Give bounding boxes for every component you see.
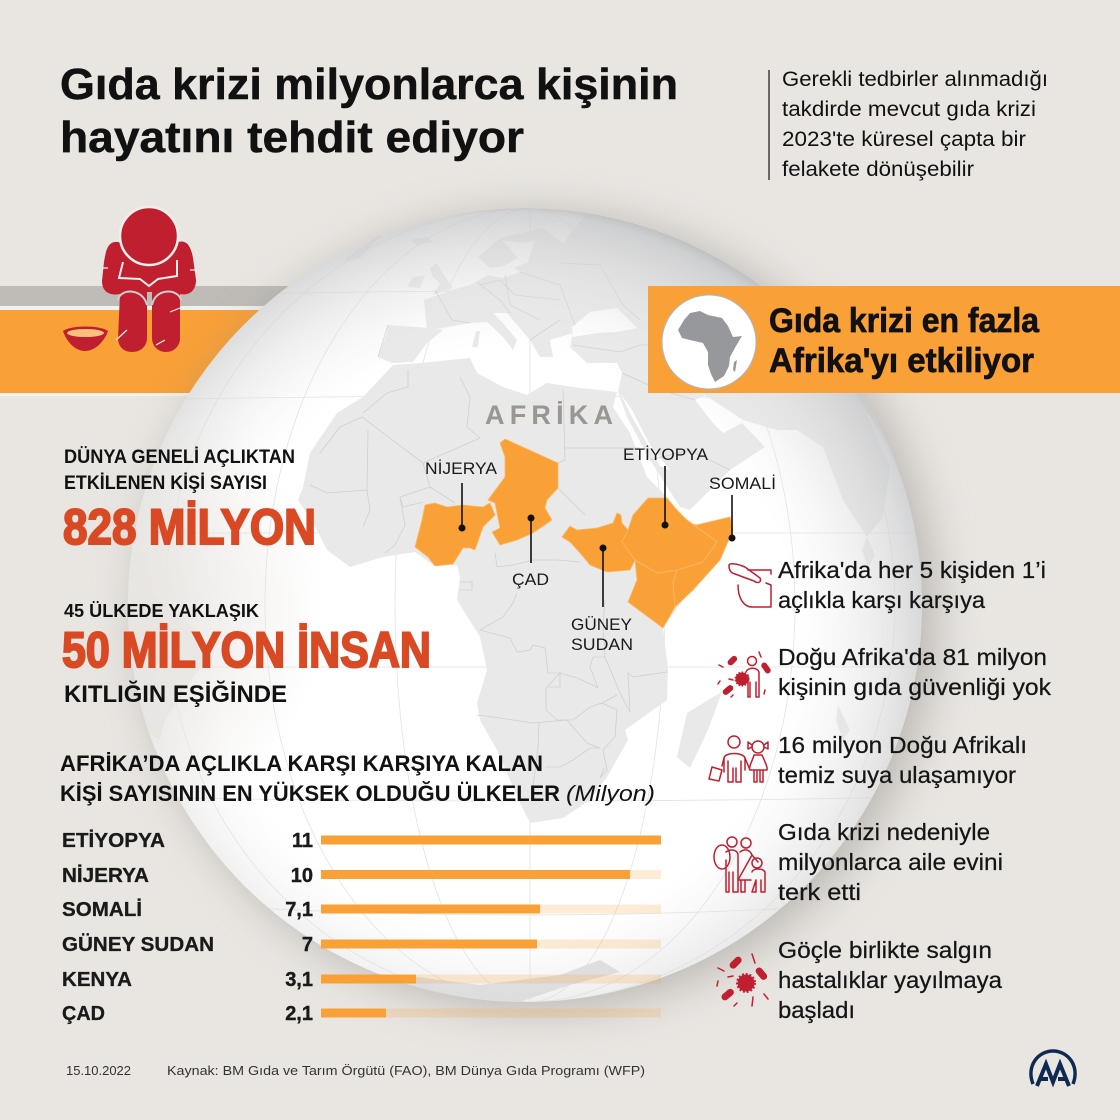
text: families left homes: Gıda krizi nedeniyle bbox=[778, 819, 990, 845]
stat: 828 million: DÜNYA GENELİ AÇLIKTAN bbox=[64, 447, 295, 468]
bar chart bbox=[62, 829, 661, 1025]
icon: virus and capsules bbox=[717, 954, 769, 1006]
stat: 828 million: 828 MİLYON bbox=[63, 499, 316, 555]
map label: Güney Sudan with leader: GÜNEY bbox=[571, 615, 632, 634]
country: Somalia bbox=[673, 517, 733, 607]
country: Ethiopia bbox=[622, 498, 717, 573]
country: Kenya bbox=[628, 560, 677, 628]
map label: Nijerya with leader: NİJERYA bbox=[425, 459, 498, 478]
title: Gıda krizi milyonlarca kişinin bbox=[60, 60, 678, 109]
map label: AFRİKA: AFRİKA bbox=[485, 400, 613, 430]
icon: hungry sitting person with bowl bbox=[63, 207, 197, 352]
text: clean water: temiz suya ulaşamıyor bbox=[778, 762, 1016, 788]
stat: 50 million: 50 MİLYON İNSAN bbox=[62, 622, 431, 678]
country borders bbox=[310, 263, 730, 787]
intro note: takdirde mevcut gıda krizi bbox=[782, 98, 1036, 121]
text: epidemics: başladı bbox=[778, 997, 855, 1023]
bar: Çad 2,1: 2,1 bbox=[285, 1003, 313, 1025]
bar: Etiyopya 11: 11 bbox=[292, 830, 313, 852]
bar: Somali 7,1: 7,1 bbox=[285, 899, 313, 921]
stat: 50 million: 45 ÜLKEDE YAKLAŞIK bbox=[64, 601, 259, 621]
icon: adult, child and bucket bbox=[709, 736, 768, 782]
bar: Etiyopya 11 bbox=[62, 829, 661, 852]
country: South Sudan bbox=[562, 513, 635, 572]
bar: Çad 2,1: ÇAD bbox=[62, 1003, 105, 1025]
afflicted countries on map bbox=[415, 439, 733, 628]
map label: Etiyopya with leader bbox=[623, 445, 709, 528]
inland seas bbox=[472, 240, 670, 470]
icon: Africa silhouette in circle bbox=[662, 295, 756, 389]
country: Nigeria bbox=[415, 503, 495, 566]
bar: Nijerya 10: 10 bbox=[291, 865, 313, 887]
callout heading bbox=[769, 302, 1040, 380]
bar: Güney Sudan 7 bbox=[62, 933, 661, 956]
map label: Çad with leader bbox=[512, 514, 549, 589]
gray and orange band bbox=[0, 286, 300, 396]
icon: person with virus and capsules bbox=[718, 652, 772, 697]
map label: Etiyopya with leader: ETİYOPYA bbox=[623, 445, 709, 464]
text: epidemics: Göçle birlikte salgın bbox=[778, 937, 992, 963]
text: food security: Doğu Afrika'da 81 milyon bbox=[778, 644, 1047, 670]
limb shading bbox=[128, 208, 922, 1002]
globe with map of Africa bbox=[128, 208, 922, 1002]
text: clean water bbox=[778, 732, 1027, 788]
text: one in five bbox=[778, 557, 1046, 613]
intro note bbox=[769, 68, 1048, 181]
text: families left homes bbox=[778, 819, 1003, 905]
map label: Somali with leader: SOMALİ bbox=[709, 474, 776, 493]
stat: 50 million bbox=[62, 601, 431, 708]
icon: bowl bbox=[63, 326, 108, 351]
globe shadow bbox=[142, 216, 934, 1008]
intro note: Gerekli tedbirler alınmadığı bbox=[782, 68, 1048, 91]
text: clean water: 16 milyon Doğu Afrikalı bbox=[778, 732, 1027, 758]
callout heading: Gıda krizi en fazla bbox=[769, 302, 1040, 340]
title: hayatını tehdit ediyor bbox=[60, 113, 524, 162]
map label: Somali with leader bbox=[709, 474, 776, 542]
icon: displaced family bbox=[714, 837, 765, 892]
chart heading: AFRİKA’DA AÇLIKLA KARŞI KARŞIYA KALAN bbox=[60, 751, 543, 776]
chart heading: KİŞİ SAYISININ EN YÜKSEK OLDUĞU ÜLKELER bbox=[60, 781, 560, 806]
text: epidemics: hastalıklar yayılmaya bbox=[778, 967, 1003, 993]
bar: Somali 7,1: SOMALİ bbox=[62, 898, 142, 921]
stat: 828 million bbox=[63, 447, 316, 555]
land masses bbox=[298, 244, 884, 1001]
stat: 50 million: KITLIĞIN EŞİĞİNDE bbox=[64, 680, 287, 708]
bar: Kenya 3,1 bbox=[62, 969, 661, 991]
bar: Çad 2,1 bbox=[62, 1003, 661, 1025]
stat: 828 million: ETKİLENEN KİŞİ SAYISI bbox=[64, 473, 267, 494]
map label: Güney Sudan with leader: SUDAN bbox=[571, 635, 633, 654]
chart heading bbox=[60, 751, 655, 806]
intro note: 2023'te küresel çapta bir bbox=[782, 128, 1026, 151]
bar: Etiyopya 11: ETİYOPYA bbox=[62, 829, 165, 852]
footer date and source: 15.10.2022 bbox=[66, 1063, 131, 1078]
icon: mortar and pestle bbox=[729, 564, 771, 607]
bar: Kenya 3,1: KENYA bbox=[62, 969, 132, 991]
bar: Güney Sudan 7: GÜNEY SUDAN bbox=[62, 933, 214, 956]
text: food security: kişinin gıda güvenliği yok bbox=[778, 674, 1051, 700]
text: food security bbox=[778, 644, 1051, 700]
intro note: felakete dönüşebilir bbox=[782, 158, 974, 181]
title bbox=[60, 60, 678, 162]
bar: Kenya 3,1: 3,1 bbox=[285, 969, 313, 991]
text: families left homes: milyonlarca aile evini bbox=[778, 849, 1003, 875]
chart heading: (Milyon) bbox=[566, 781, 655, 806]
footer date and source: Kaynak: BM Gıda ve Tarım Örgütü (FAO), BM Dünya Gıda Programı (WFP) bbox=[167, 1063, 645, 1078]
callout heading: Afrika'yı etkiliyor bbox=[769, 342, 1034, 380]
bar: Güney Sudan 7: 7 bbox=[302, 934, 313, 956]
text: epidemics bbox=[778, 937, 1003, 1023]
bar: Nijerya 10 bbox=[62, 864, 661, 887]
panel: Africa callout bbox=[648, 286, 1120, 393]
text: one in five: Afrika'da her 5 kişiden 1’i bbox=[778, 557, 1046, 583]
bar: Somali 7,1 bbox=[62, 898, 661, 921]
map label: Nijerya with leader bbox=[425, 459, 498, 532]
map label: Çad with leader: ÇAD bbox=[512, 570, 549, 589]
country: Chad bbox=[488, 439, 558, 545]
icon: AA logo bbox=[1031, 1051, 1075, 1086]
text: families left homes: terk etti bbox=[778, 879, 861, 905]
map label: Güney Sudan with leader bbox=[571, 544, 633, 654]
bar: Nijerya 10: NİJERYA bbox=[62, 864, 149, 887]
text: one in five: açlıkla karşı karşıya bbox=[778, 587, 986, 613]
